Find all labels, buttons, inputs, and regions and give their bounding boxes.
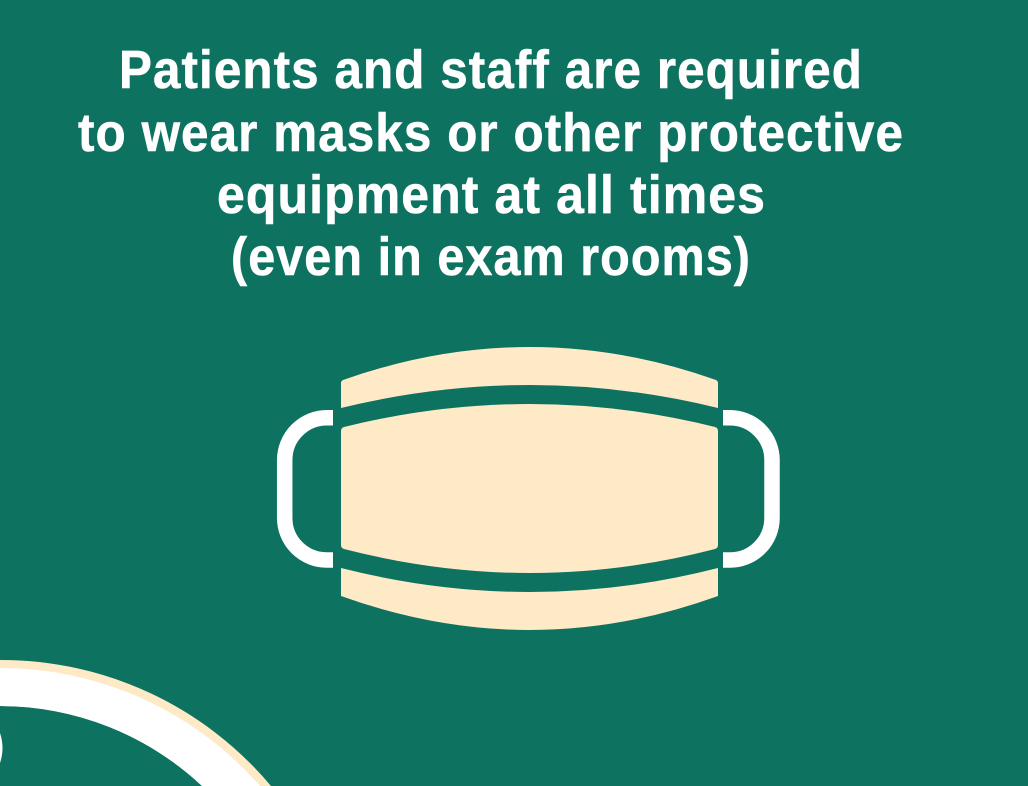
title (78, 40, 904, 287)
decorative corner arc (0, 660, 271, 786)
arc white band (0, 668, 260, 786)
title: (even in exam rooms) (231, 227, 751, 287)
title: to wear masks or other protective (78, 103, 904, 163)
mask bottom band (341, 568, 718, 630)
arc cream edge (0, 660, 271, 786)
right ear loop (723, 418, 772, 560)
icon: face mask (285, 347, 772, 630)
title: Patients and staff are required (119, 40, 863, 100)
mask main panel (341, 404, 718, 573)
title: equipment at all times (217, 165, 766, 225)
left ear loop (285, 418, 333, 560)
small white fragment at left edge (0, 733, 2, 763)
mask top band (341, 347, 718, 408)
